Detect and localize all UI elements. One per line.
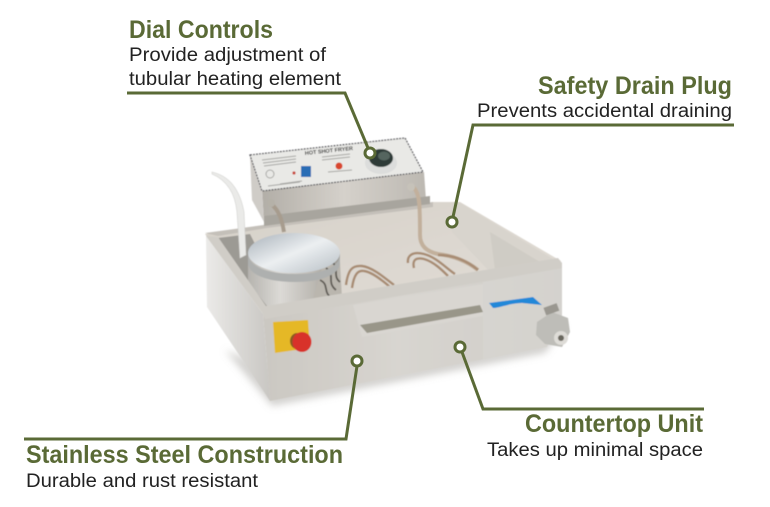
- safety drain plug leader line: [453, 125, 734, 217]
- callout: countertop unit: [455, 342, 704, 461]
- stainless steel description: Durable and rust resistant: [26, 471, 259, 492]
- callout: safety drain plug: [447, 72, 734, 227]
- panel label: HOT SHOT FRYER: [305, 146, 353, 157]
- pan opening: [248, 233, 340, 273]
- callout: dial controls: tubular heating element: [129, 69, 342, 90]
- emergency stop button: [273, 320, 312, 353]
- fryer rear and interior: [205, 202, 561, 312]
- basket and pan: [248, 233, 342, 306]
- countertop unit heading: Countertop Unit: [525, 410, 704, 438]
- blue badge: [301, 166, 311, 177]
- fryer photo illustration: [205, 138, 570, 406]
- stainless steel heading: Stainless Steel Construction: [26, 441, 343, 469]
- dial controls heading: Dial Controls: [129, 16, 273, 44]
- control panel face: [250, 138, 423, 191]
- left face: [206, 236, 270, 401]
- callout: dial controls: [127, 16, 375, 158]
- rear rim: [205, 202, 433, 236]
- control box: [250, 138, 430, 226]
- dial: [365, 149, 397, 174]
- heating coils: [346, 253, 478, 288]
- dial controls description: Provide adjustment of: [129, 45, 327, 66]
- coiled basket: [312, 262, 342, 302]
- heating element right: [412, 186, 478, 270]
- drain channel: [360, 305, 483, 333]
- heating element left: [271, 204, 284, 232]
- rim: [206, 236, 562, 319]
- shadow under fryer: [225, 325, 565, 406]
- blue valve handle: [489, 297, 542, 308]
- safety drain plug description: Prevents accidental draining: [477, 101, 732, 122]
- front face: [263, 263, 562, 401]
- box front: [262, 172, 426, 222]
- funnel handle: [212, 172, 246, 258]
- countertop unit description: Takes up minimal space: [487, 440, 703, 461]
- red indicator: [336, 162, 342, 170]
- panel fine print: [262, 154, 352, 186]
- countertop unit leader line: [462, 352, 704, 409]
- stainless steel leader line: [24, 366, 357, 439]
- valve: [536, 303, 570, 347]
- right interior wall: [452, 203, 553, 272]
- pan body: [248, 254, 340, 306]
- front panel right section: [483, 268, 562, 360]
- left interior wall: [218, 234, 285, 308]
- dial controls leader line: [127, 93, 368, 148]
- callout: stainless steel construction: [24, 356, 362, 492]
- channel recess: [353, 284, 483, 337]
- safety drain plug heading: Safety Drain Plug: [538, 72, 732, 100]
